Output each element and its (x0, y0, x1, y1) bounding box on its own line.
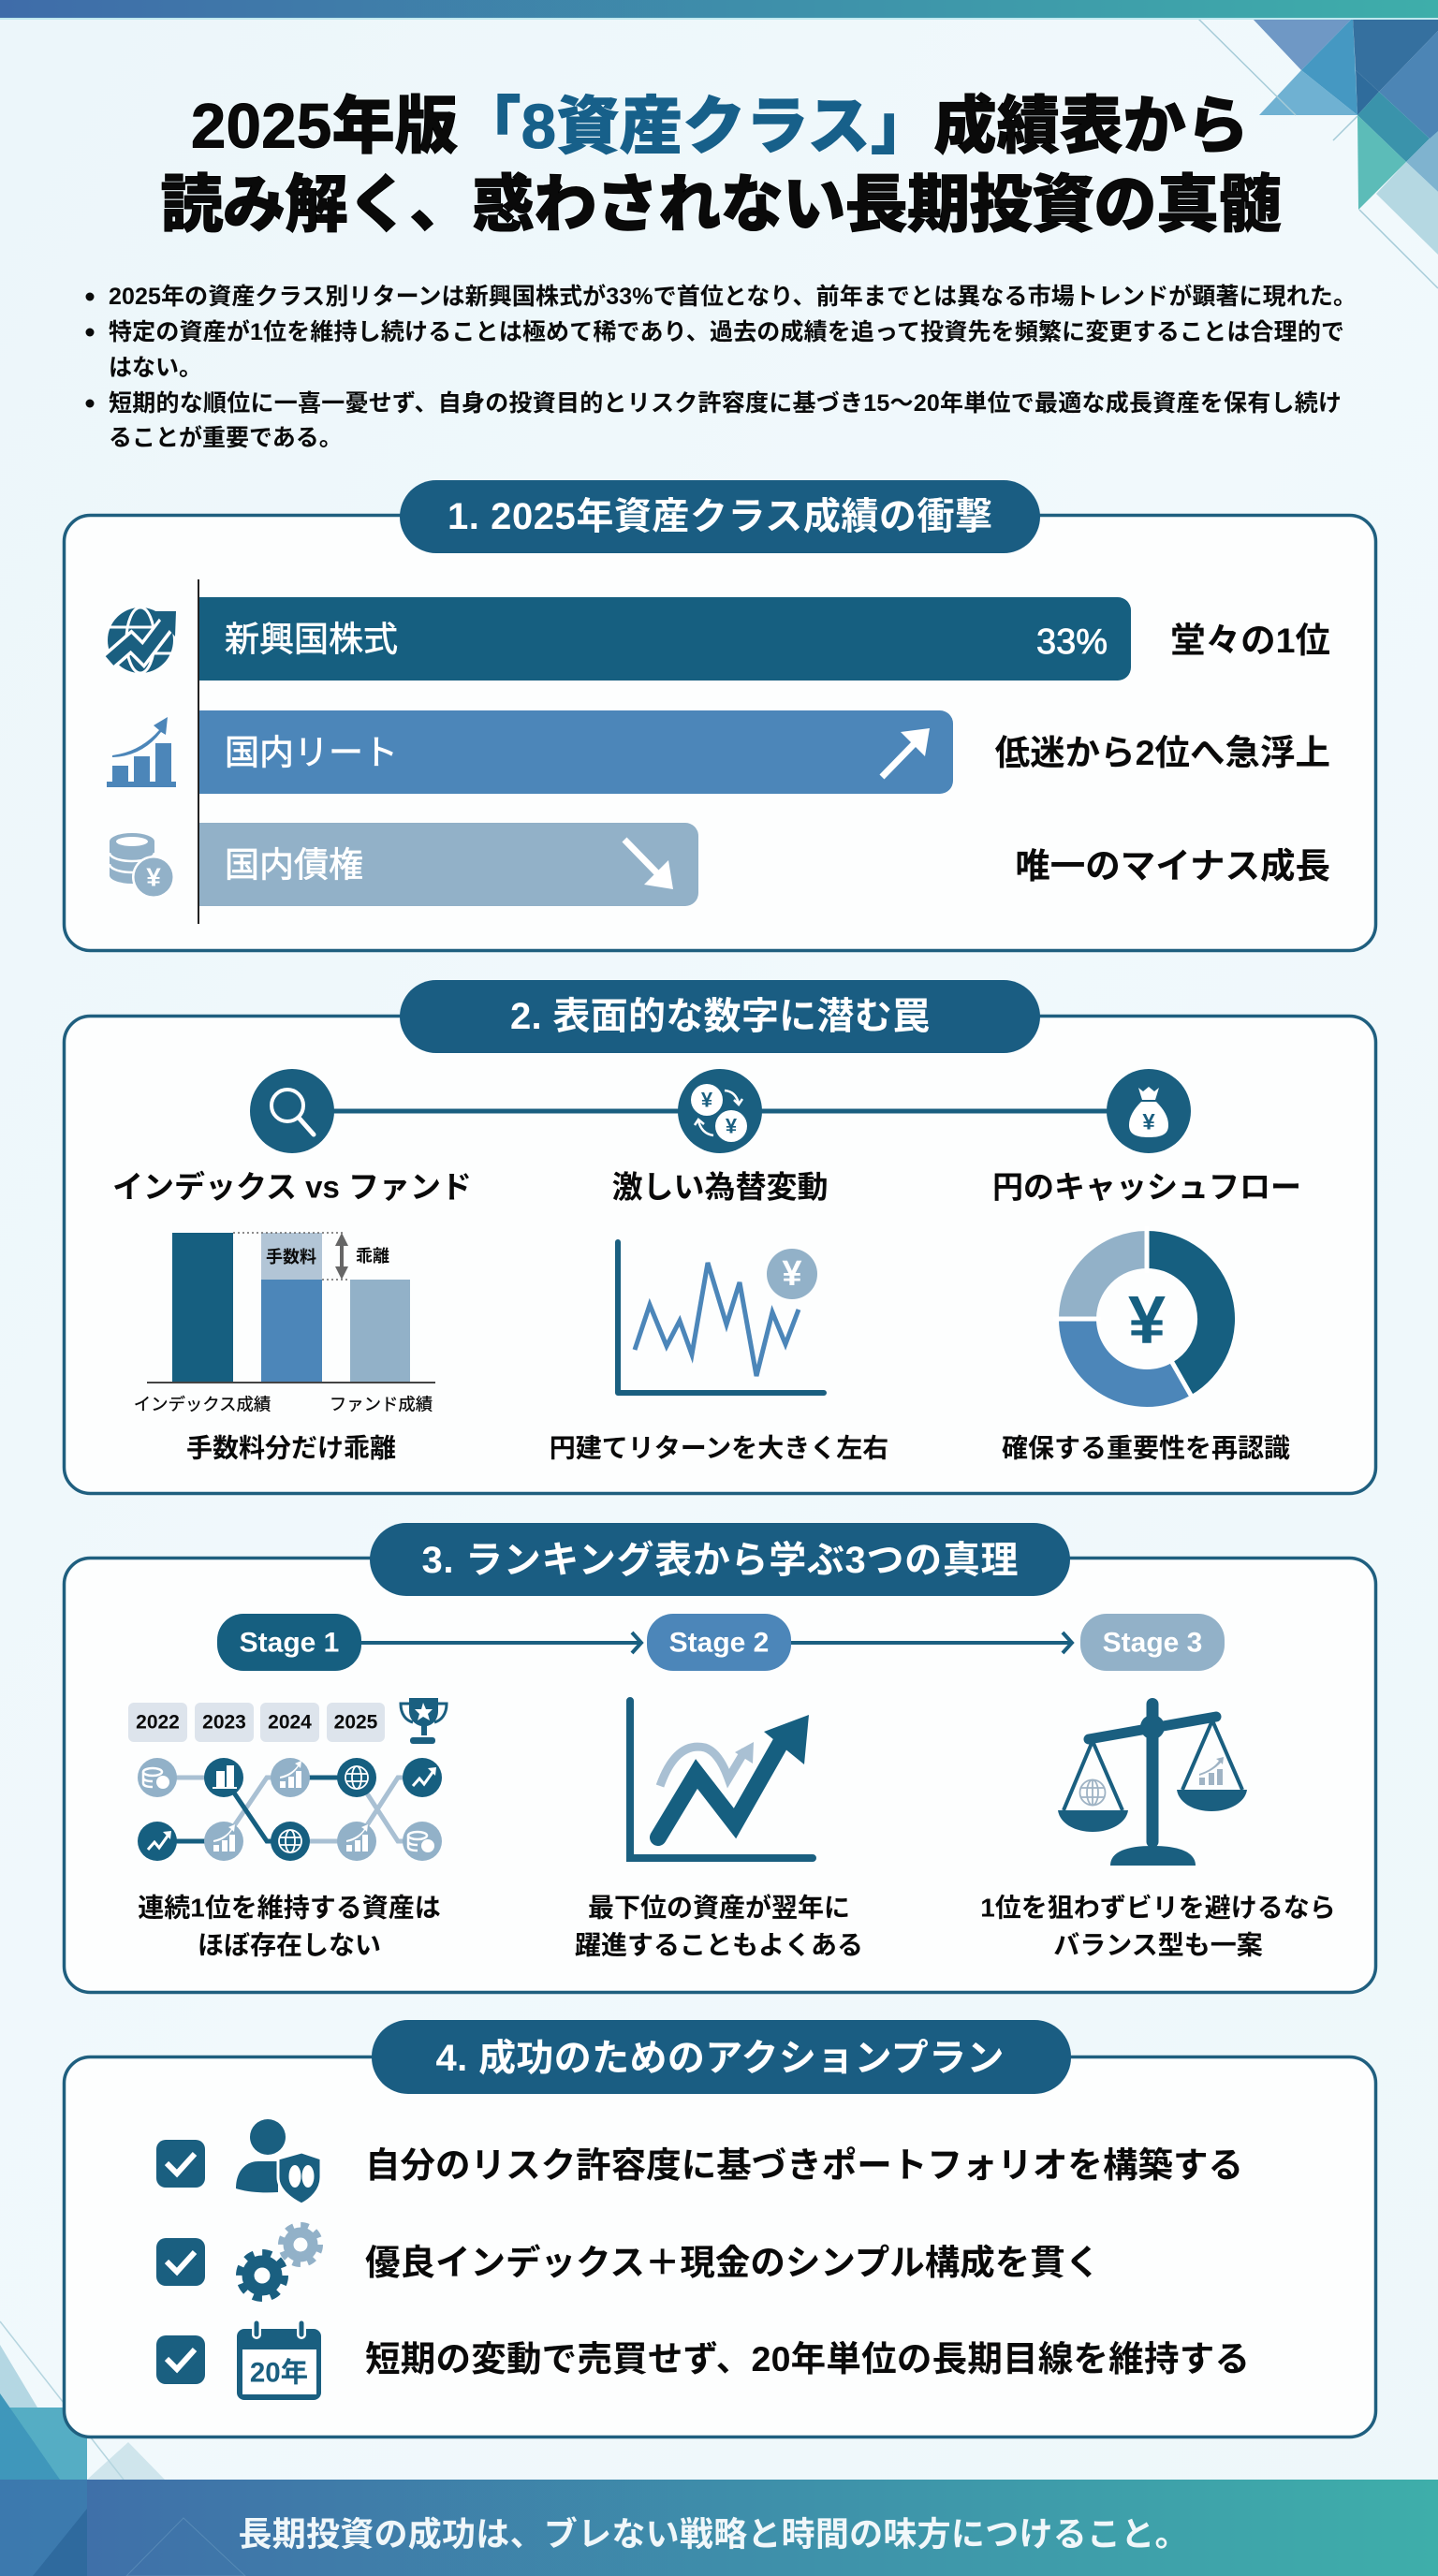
donut chart: yen cash flow (1053, 1226, 1216, 1398)
year labels: 2024 (268, 1711, 312, 1734)
checkbox 1 (156, 2140, 205, 2188)
caption: fee gap: 手数料分だけ乖離 (186, 1434, 396, 1462)
stage 1 pill: Stage 1 (240, 1627, 339, 1659)
action text 2: 優良インデックス＋現金のシンプル構成を貫く (365, 2243, 1100, 2282)
bar: emerging equities (199, 597, 1131, 681)
heading pill 3: 3. ランキング表から学ぶ3つの真理 (421, 1540, 1019, 1581)
bar: domestic bonds: 国内債権 (225, 846, 363, 884)
title (161, 92, 1281, 240)
icon: currency exchange: ¥ (726, 1114, 738, 1138)
caption: stage 2: 最下位の資産が翌年に (588, 1893, 850, 1923)
caption: stage 3: バランス型も一案 (1053, 1930, 1263, 1960)
caption: stage 3: 1位を狙わずビリを避けるなら (980, 1893, 1336, 1923)
decoration: top-right geometric shapes (1197, 18, 1438, 288)
bar chart: index vs fund (134, 1233, 435, 1413)
chart: rising arrow (630, 1701, 813, 1858)
rank connector lines (157, 1778, 422, 1841)
bar: domestic bonds (199, 823, 698, 906)
connector line (292, 1108, 1149, 1114)
stage flow arrows (361, 1632, 1072, 1653)
panel: 2. traps behind the numbers (64, 980, 1376, 1494)
donut chart: yen cash flow: ¥ (1128, 1283, 1166, 1358)
stage 1 pill (217, 1614, 361, 1671)
caption: stage 1: 連続1位を維持する資産は (138, 1893, 441, 1923)
heading pill 2 (400, 980, 1040, 1053)
icon: currency exchange: ¥ (701, 1088, 713, 1112)
heading pill 4 (372, 2020, 1071, 2094)
action text 3: 短期の変動で売買せず、20年単位の長期目線を維持する (365, 2339, 1250, 2378)
icon: coin stack with yen: ¥ (146, 863, 161, 891)
icon: coin stack with yen (110, 833, 175, 899)
caption: yen return: 円建てリターンを大きく左右 (550, 1434, 888, 1462)
summary bullet list: ることが重要である。 (109, 424, 343, 451)
caption: stage 1 (138, 1893, 441, 1960)
decoration: bottom-left geometric shapes (0, 2321, 165, 2480)
icon: currency exchange (678, 1069, 762, 1153)
caption: stage 1: ほぼ存在しない (198, 1930, 381, 1960)
caption: secure yen: 確保する重要性を再認識 (1002, 1434, 1290, 1462)
line chart: currency fluctuation (618, 1242, 824, 1393)
top banner bar (0, 0, 1438, 20)
bar: domestic REIT: 国内リート (225, 734, 398, 771)
stage 3 pill: Stage 3 (1103, 1627, 1202, 1659)
icon: 20-year calendar: 20年 (250, 2357, 308, 2389)
bar: emerging equities: 新興国株式 (225, 620, 398, 659)
icon: person with brain shield (236, 2119, 321, 2204)
icon: magnifier (250, 1069, 334, 1153)
icon: gears (240, 2225, 320, 2299)
bar chart: index vs fund: ファンド成績 (330, 1395, 433, 1413)
summary bullet list (86, 283, 1357, 451)
bar chart: index vs fund: 乖離 (356, 1247, 389, 1266)
heading pill 2: 2. 表面的な数字に潜む罠 (510, 996, 930, 1037)
icon: balance scale (1058, 1698, 1247, 1866)
label: only negative: 唯一のマイナス成長 (1015, 846, 1330, 886)
icon: trophy (401, 1698, 447, 1744)
panel: 1. asset class results (64, 480, 1376, 951)
bar chart: index vs fund: 手数料 (266, 1248, 316, 1266)
heading: index vs fund: インデックス vs ファンド (112, 1170, 472, 1204)
axis line (198, 579, 199, 924)
caption: stage 2: 躍進することもよくある (575, 1930, 863, 1960)
line chart: currency fluctuation: ¥ (782, 1254, 802, 1294)
heading pill 4: 4. 成功のためのアクションプラン (436, 2038, 1004, 2079)
icon: globe with trend arrow (108, 607, 176, 673)
caption: stage 2 (575, 1893, 863, 1960)
label: jump to second: 低迷から2位へ急浮上 (995, 733, 1330, 772)
heading: currency swings: 激しい為替変動 (612, 1170, 828, 1204)
panel: 3. truths from ranking table (64, 1523, 1376, 1992)
summary bullet list: 特定の資産が1位を維持し続けることは極めて稀であり、過去の成績を追って投資先を頻繁に変更することは合理的で (109, 318, 1344, 345)
checkbox 2 (156, 2238, 205, 2286)
stage 3 pill (1080, 1614, 1225, 1671)
summary bullet list: 短期的な順位に一喜一憂せず、自身の投資目的とリスク許容度に基づき15～20年単位で最適な成長資産を保有し続け (109, 390, 1342, 417)
footer banner (0, 2480, 1438, 2576)
title: 2025年版「8資産クラス」成績表から (191, 92, 1249, 161)
heading pill 3 (370, 1523, 1070, 1596)
year labels: 2023 (202, 1711, 246, 1734)
title: 読み解く、惑わされない長期投資の真髄 (161, 170, 1281, 240)
bar: domestic REIT (199, 710, 953, 794)
stage 2 pill: Stage 2 (669, 1627, 769, 1659)
ranking diagram (128, 1698, 447, 1861)
year labels: 2025 (334, 1711, 378, 1734)
caption: stage 3 (980, 1893, 1336, 1960)
stage 2 pill (647, 1614, 791, 1671)
panel: 4. action plan (64, 2020, 1376, 2437)
bar: emerging equities: 33% (1036, 622, 1108, 662)
icon: money bag (1107, 1069, 1191, 1153)
nodes (138, 1758, 442, 1861)
heading pill 1: 1. 2025年資産クラス成績の衝撃 (448, 496, 992, 537)
action text 1: 自分のリスク許容度に基づきポートフォリオを構築する (365, 2145, 1243, 2185)
footer banner: 長期投資の成功は、ブレない戦略と時間の味方につけること。 (238, 2514, 1189, 2554)
heading pill 1 (400, 480, 1040, 553)
summary bullet list: はない。 (109, 355, 202, 381)
icon: money bag: ¥ (1142, 1110, 1155, 1134)
label: first place: 堂々の1位 (1170, 621, 1330, 660)
heading: yen cash flow: 円のキャッシュフロー (992, 1170, 1301, 1204)
icon: 20-year calendar (237, 2323, 321, 2400)
checkbox 3 (156, 2335, 205, 2384)
summary bullet list: 2025年の資産クラス別リターンは新興国株式が33%で首位となり、前年までとは異なる市場トレンドが顕著に現れた。 (109, 283, 1357, 310)
icon: rising bars (107, 717, 176, 787)
year labels: 2022 (136, 1711, 180, 1734)
year labels (128, 1703, 385, 1742)
bar chart: index vs fund: インデックス成績 (134, 1395, 271, 1413)
